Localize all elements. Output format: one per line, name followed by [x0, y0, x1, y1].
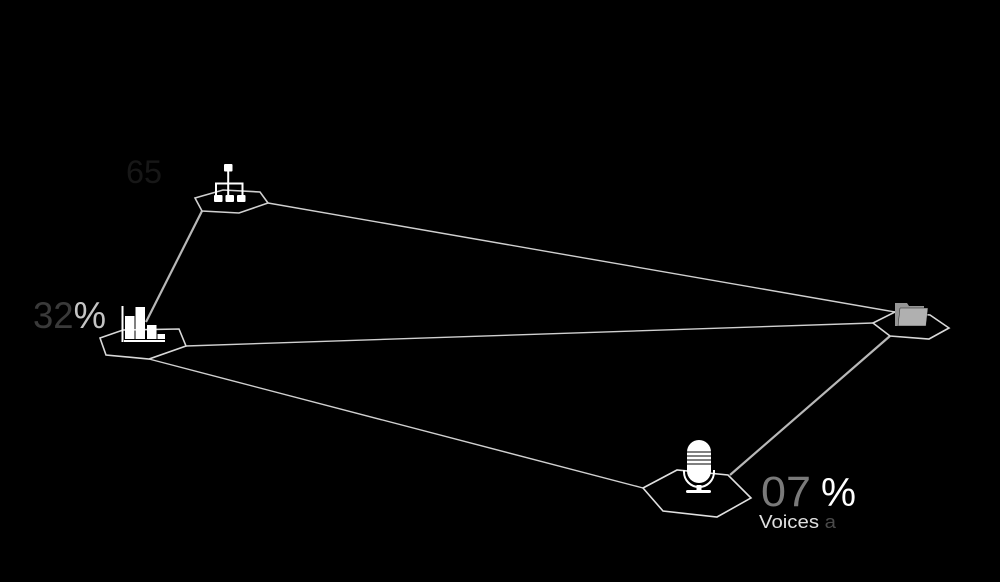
hexagon: left node — [100, 329, 186, 359]
label: 07: 07 — [761, 468, 811, 516]
label: 32%: 32% — [33, 295, 106, 336]
icon: hierarchy — [214, 164, 246, 202]
caption: Voices a: Voices a — [759, 512, 837, 532]
hexagon: top node — [195, 190, 268, 213]
icon: folder — [895, 303, 928, 326]
hexagon: bottom node — [643, 470, 751, 517]
label: percent sign: % — [821, 471, 856, 515]
connecting lines — [146, 203, 895, 488]
hexagon: right node — [873, 312, 949, 339]
icon: bar chart — [122, 306, 165, 342]
label: 65: 65 — [126, 154, 162, 190]
icon: microphone — [684, 440, 714, 493]
